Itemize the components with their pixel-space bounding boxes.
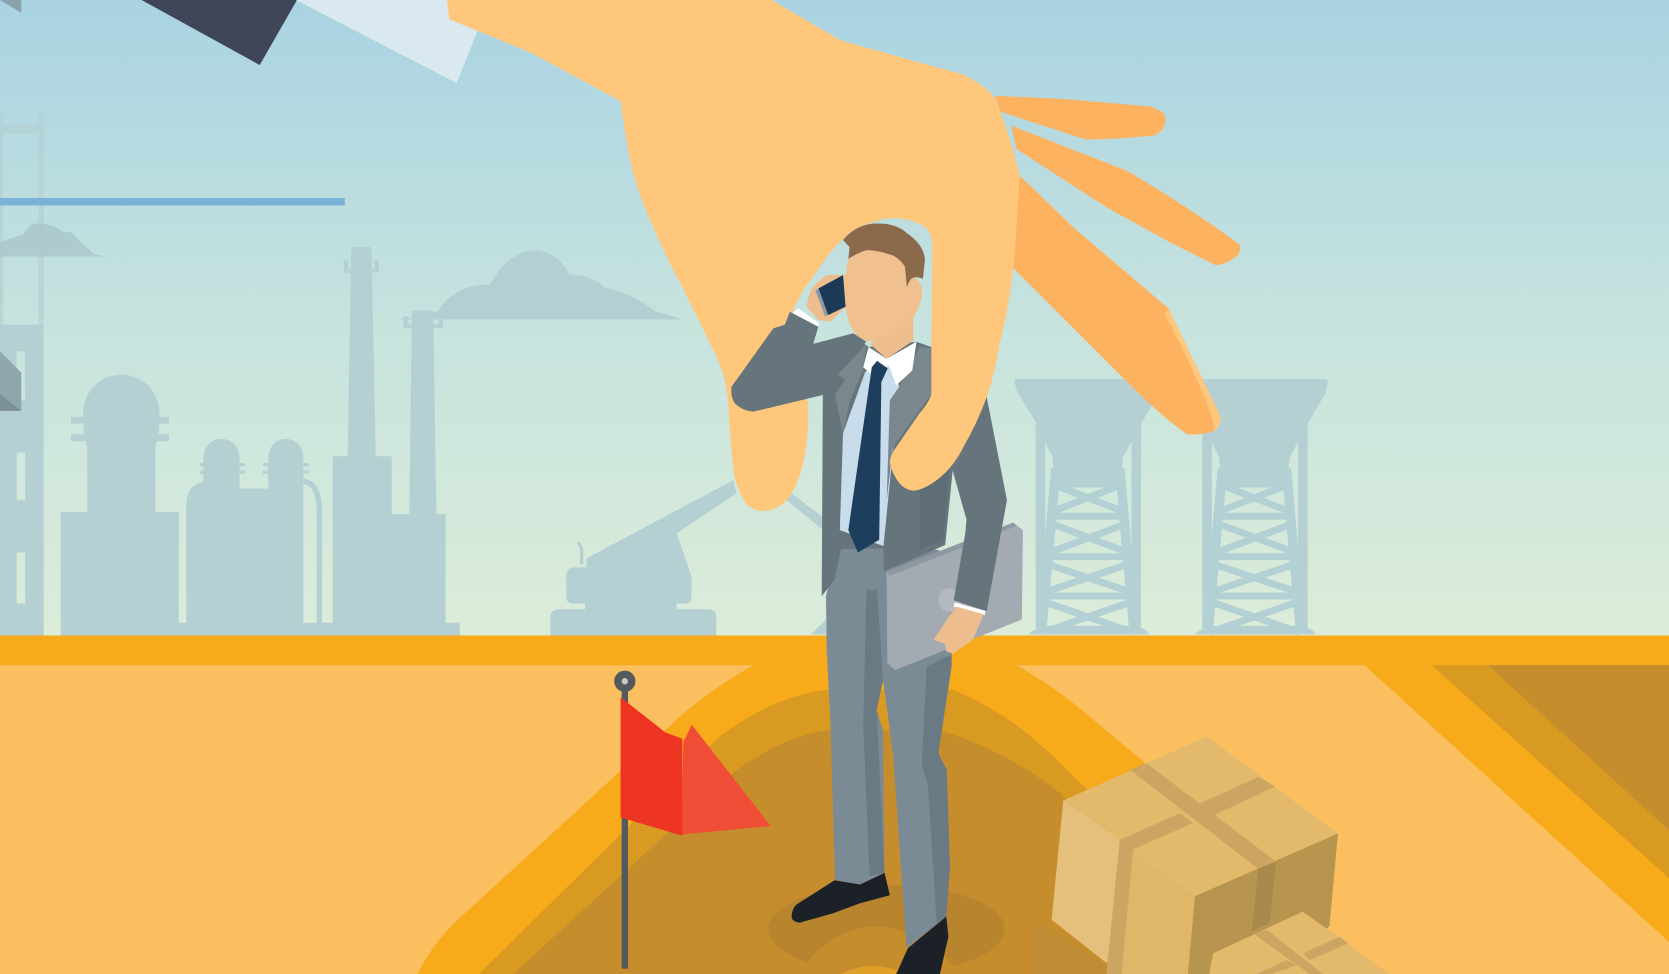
raised arm with phone xyxy=(731,275,866,412)
hand on tablet xyxy=(933,607,984,654)
businessman body xyxy=(792,223,1023,974)
red flag xyxy=(614,671,771,969)
shirt xyxy=(840,362,899,546)
lapels xyxy=(835,344,931,500)
giant hand palm xyxy=(447,0,1020,511)
sky background xyxy=(0,0,1669,639)
left scaffold tower xyxy=(0,112,44,635)
far arm xyxy=(953,397,1007,611)
shoes xyxy=(792,873,890,923)
hand at ear xyxy=(807,275,846,321)
sleeve xyxy=(731,312,866,412)
base slab xyxy=(179,623,460,635)
domed tank xyxy=(61,375,179,635)
tie xyxy=(848,361,888,552)
sleeve and cuff at top left xyxy=(0,0,478,83)
lattice tower one xyxy=(1014,379,1161,634)
twin tanks xyxy=(186,439,309,635)
small cloud xyxy=(0,223,106,257)
cuff xyxy=(792,308,819,330)
jacket torso xyxy=(822,335,963,596)
pump beam xyxy=(787,493,826,634)
lattice tower two xyxy=(1181,379,1328,634)
pump machine xyxy=(550,480,737,635)
phone edge xyxy=(815,288,828,316)
large box xyxy=(1032,737,1338,974)
jacket shaded side xyxy=(920,470,949,550)
crane boom xyxy=(0,198,345,205)
neck xyxy=(870,317,913,359)
collar xyxy=(863,342,916,385)
factory skyline silhouettes xyxy=(0,112,1328,635)
chimneys xyxy=(333,247,446,635)
trousers xyxy=(826,538,952,948)
tablet xyxy=(887,523,1023,670)
factory cloud xyxy=(396,250,683,319)
hair xyxy=(843,223,925,287)
head xyxy=(845,247,922,341)
phone xyxy=(818,275,846,315)
ground xyxy=(0,635,1669,974)
giant hand fingers xyxy=(995,96,1240,435)
cuff xyxy=(954,602,986,615)
small box xyxy=(1209,912,1390,974)
pipe xyxy=(303,481,319,626)
